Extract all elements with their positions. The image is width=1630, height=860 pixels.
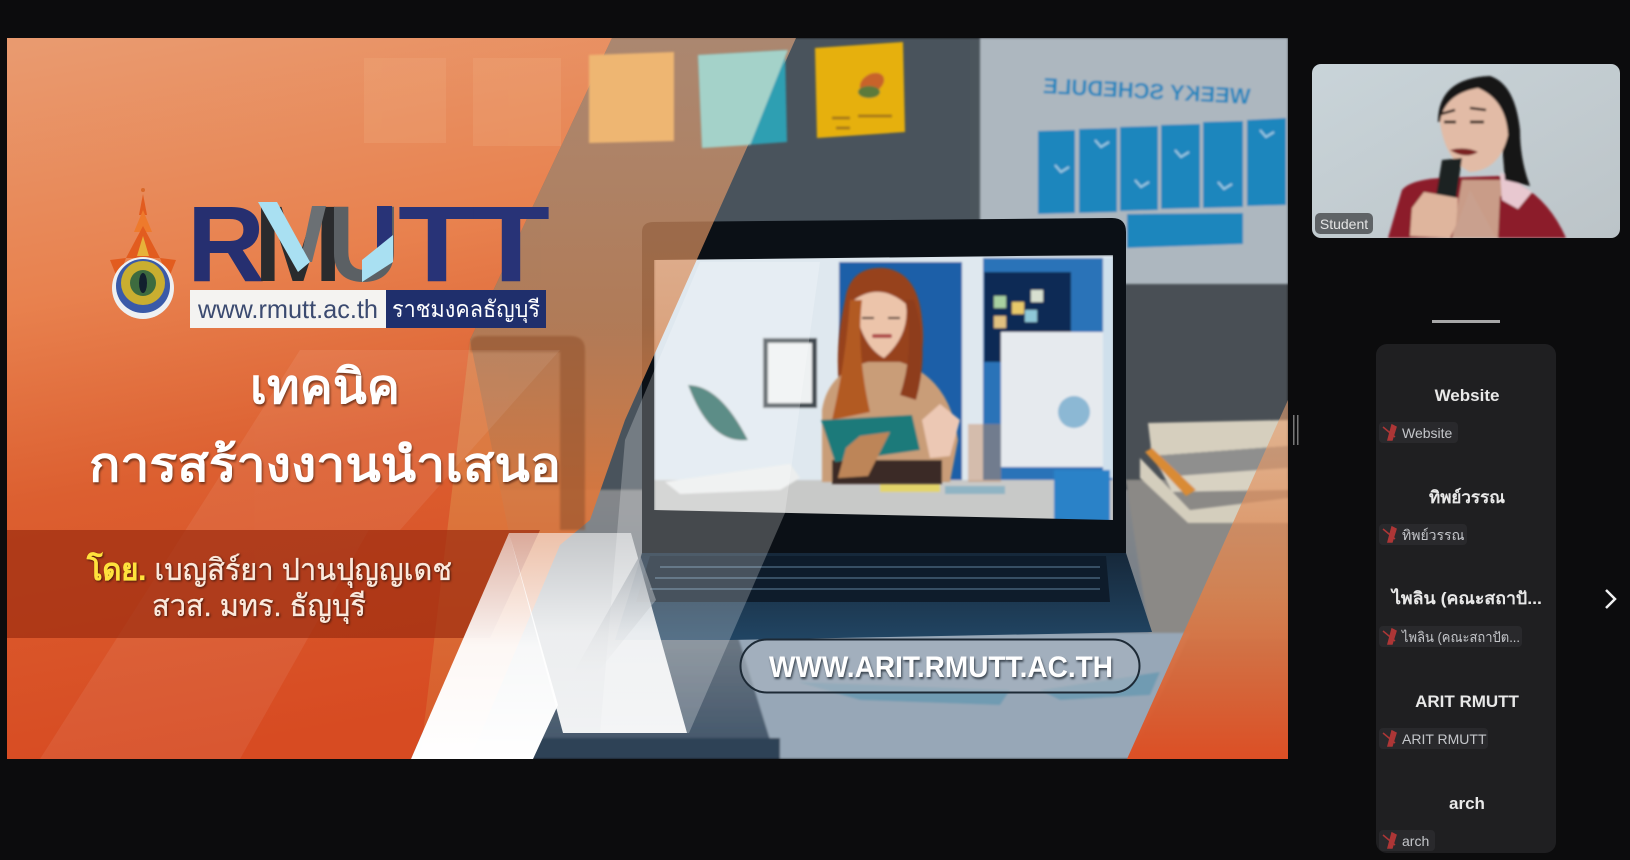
orange panel — [7, 38, 612, 759]
sticky note: orange — [589, 52, 674, 143]
translucent white diagonal band — [612, 336, 810, 733]
tablet — [821, 415, 920, 462]
icon: next chevron — [1606, 590, 1615, 608]
mirrored schedule heading: WEEKY SCHEDULE — [1043, 73, 1251, 109]
participant: Pailin: ไพลิน (คณะสถาปั... — [1390, 588, 1542, 608]
participant: ARIT RMUTT: ARIT RMUTT — [1402, 731, 1487, 747]
university seal — [110, 188, 176, 319]
sticky note: teal — [698, 50, 788, 148]
speaker name tag — [1315, 213, 1373, 234]
light diagonal streaks — [40, 350, 560, 759]
gray translucent facet — [596, 557, 656, 638]
keyboard — [636, 556, 1110, 602]
speaker name tag: Student — [1320, 216, 1368, 232]
url text: www.rmutt.ac.th — [197, 294, 378, 324]
logo accent on U: light blue facet — [362, 235, 393, 282]
participant: Website — [1379, 386, 1499, 443]
wordmark letters: R — [187, 183, 265, 304]
white right quadrilateral — [509, 533, 687, 733]
title line 2: การสร้างงานนำเสนอ — [89, 439, 561, 492]
name label navy — [386, 290, 546, 328]
url pill: WWW.ARIT.RMUTT.AC.TH — [769, 651, 1113, 684]
name text: ราชมงคลธัญบุรี — [392, 296, 540, 323]
participant: arch: arch — [1402, 833, 1429, 849]
url pill — [740, 640, 1140, 692]
speaker figure — [1388, 76, 1566, 238]
logo: RMUTT — [110, 183, 550, 328]
logo accent on U: navy stem — [377, 206, 392, 251]
whiteboard: weekly schedule — [980, 38, 1288, 284]
resize handle — [1293, 415, 1298, 445]
presenter name: โดย. เบญสิร์ยา ปานปุญญเดช — [86, 551, 452, 589]
participant: Tippawan: ทิพย์วรรณ — [1429, 487, 1505, 507]
white left triangle — [411, 533, 558, 759]
presenter name band — [7, 530, 540, 638]
laptop screen: video of presenter — [654, 255, 1114, 525]
participant: Website: Website — [1435, 386, 1499, 405]
panel: speaker video tile — [1312, 64, 1620, 238]
wordmark letters — [187, 183, 550, 304]
participant: Website: Website — [1402, 425, 1453, 441]
laptop keyboard base — [615, 553, 1152, 640]
plant — [688, 385, 748, 440]
laptop lid and bezel — [642, 218, 1126, 553]
panel: presentation slide — [7, 38, 1288, 759]
participant: arch: arch — [1449, 794, 1485, 813]
presenter affiliation: สวส. มทร. ธัญบุรี — [152, 590, 366, 625]
panel: participants list — [1376, 344, 1556, 853]
laptop — [615, 218, 1152, 640]
faint ghost notes — [364, 58, 561, 146]
participant: ARIT RMUTT: ARIT RMUTT — [1415, 692, 1520, 711]
title line 1: เทคนิค — [250, 361, 400, 414]
participant: Tippawan — [1379, 487, 1505, 545]
participant: Pailin: ไพลิน (คณะสถาปัต... — [1401, 629, 1520, 645]
presenter trousers — [832, 460, 942, 484]
url label white — [190, 290, 386, 328]
logo accent on M: light blue facet — [258, 202, 310, 272]
ghost laptop lid on orange panel — [470, 336, 585, 530]
presenter — [821, 268, 960, 484]
right orange triangle — [1127, 400, 1288, 759]
books stack — [1140, 420, 1288, 523]
slide photo background: office wall and desk — [411, 38, 1288, 759]
wordmark letters: U — [328, 183, 400, 304]
participant: Pailin — [1379, 588, 1542, 647]
wordmark letters: T — [398, 183, 476, 304]
wordmark letters: M — [254, 183, 342, 304]
drag divider — [1432, 320, 1500, 323]
participant: ARIT RMUTT — [1379, 692, 1520, 749]
participant: Tippawan: ทิพย์วรรณ — [1402, 527, 1465, 543]
translucent orange diagonal band — [420, 38, 796, 759]
wordmark letters: T — [472, 183, 550, 304]
yellow sticky note — [815, 42, 905, 138]
white geometric shapes — [411, 533, 687, 759]
logo accent on M: gray facet — [300, 206, 326, 262]
participant: arch — [1379, 794, 1485, 851]
